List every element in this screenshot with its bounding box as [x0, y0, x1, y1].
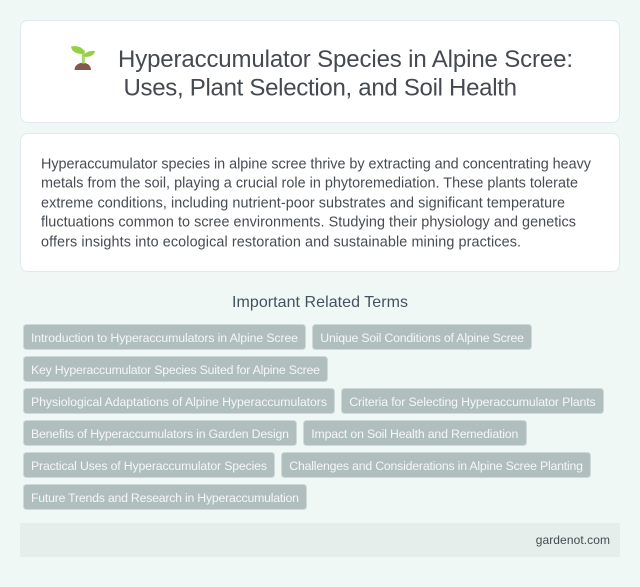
icon: seedling [71, 46, 95, 70]
description text: offers insights into ecological restoration and sustainable mining practices. [41, 234, 521, 250]
chip: soil health impact [304, 420, 526, 446]
chip: future trends [24, 484, 306, 510]
chip: soil health impact: Impact on Soil Health and Remediation [311, 427, 518, 441]
chip: garden design benefits: Benefits of Hyperaccumulators in Garden Design [31, 427, 289, 441]
panel: title header [20, 20, 620, 122]
description text: fluctuations common to scree environments. Studying their physiology and genetics [41, 214, 576, 230]
chip: garden design benefits [24, 420, 296, 446]
description text: metals from the soil, playing a crucial role in phytoremediation. These plants tolerate [41, 176, 578, 192]
chip: physiological adaptations: Physiological Adaptations of Alpine Hyperaccumulators [31, 395, 327, 409]
chip: challenges: Challenges and Considerations in Alpine Scree Planting [289, 459, 583, 473]
chip: key species: Key Hyperaccumulator Species Suited for Alpine Scree [31, 363, 320, 377]
chip: challenges [282, 452, 590, 478]
chip: practical uses: Practical Uses of Hyperaccumulator Species [31, 459, 267, 473]
chip: future trends: Future Trends and Research in Hyperaccumulation [31, 491, 299, 505]
chip: introduction [24, 324, 306, 350]
chip: soil conditions [312, 324, 532, 350]
chip: physiological adaptations [24, 388, 334, 414]
chip: soil conditions: Unique Soil Conditions of Alpine Scree [320, 331, 524, 345]
title: Hyperaccumulator Species in Alpine Scree: [118, 46, 573, 73]
chip: practical uses [24, 452, 274, 478]
panel: related term chips [24, 324, 604, 510]
chip: introduction: Introduction to Hyperaccumulators in Alpine Scree [31, 331, 298, 345]
footer [20, 523, 620, 557]
footer: gardenot.com [536, 533, 610, 547]
description text: Hyperaccumulator species in alpine scree thrive by extracting and concentrating heavy [41, 156, 592, 172]
panel: description [20, 134, 620, 272]
heading: important related terms: Important Related Terms [232, 294, 408, 311]
chip: key species [24, 356, 328, 382]
description text [41, 156, 592, 250]
title [118, 46, 573, 102]
chip: selection criteria [342, 388, 604, 414]
title: Uses, Plant Selection, and Soil Health [124, 74, 517, 102]
description text: extreme conditions, including nutrient-poor substrates and significant temperature [41, 195, 565, 211]
chip: selection criteria: Criteria for Selecting Hyperaccumulator Plants [349, 395, 596, 409]
